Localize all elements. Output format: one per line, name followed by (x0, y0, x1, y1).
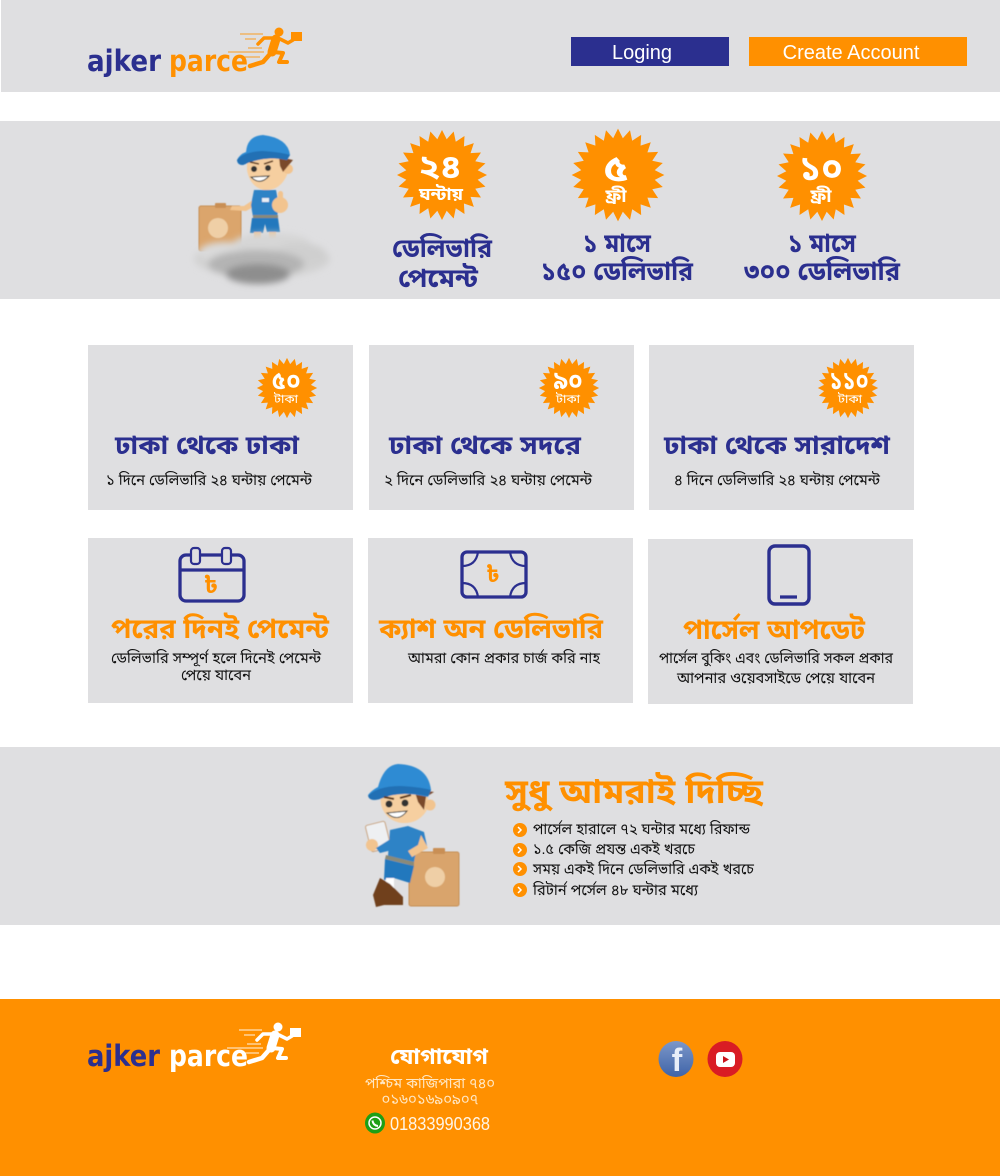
badge: 10 free (777, 131, 867, 221)
pricing card: Dhaka to district (369, 345, 634, 510)
face (386, 800, 392, 808)
heading: সুধু আমরাই দিচ্ছি (504, 771, 764, 812)
courier on cloud illustration (194, 135, 330, 284)
parcel box (409, 852, 459, 906)
benefits list: পার্সেল হারালে ৭২ ঘন্টার মধ্যে রিফান্ড (533, 820, 751, 838)
shoes (373, 878, 403, 907)
login button: Loging (612, 42, 672, 64)
offer text: 300 deliveries: ১ মাসে (788, 228, 856, 258)
feature card: parcel update: পার্সেল আপডেট (683, 612, 865, 645)
arm to box (230, 200, 255, 211)
offer text: delivery payment: ডেলিভারি (392, 232, 492, 263)
icon: banknote (462, 552, 526, 597)
feature card: next-day payment: পরের দিনই পেমেন্ট (111, 612, 329, 644)
badge: 24 hours (397, 130, 487, 220)
icon: whatsapp (365, 1112, 385, 1134)
icon: smartphone (769, 546, 809, 604)
icon: calendar (180, 548, 244, 601)
badge: 5 free (572, 129, 664, 221)
footer logo: ajker (87, 1039, 161, 1073)
pricing card: Dhaka to nationwide (649, 345, 914, 510)
shirt and shorts (388, 826, 427, 862)
header panel (1, 0, 1000, 92)
pricing card: Dhaka to Dhaka: ৫০ (272, 367, 300, 395)
feature card: cash on delivery (368, 538, 633, 703)
head (247, 155, 287, 190)
offer text: 150 deliveries: ১ মাসে (583, 228, 651, 258)
icon: banknote: ৳ (486, 562, 500, 587)
feature card: cash on delivery: ক্যাশ অন ডেলিভারি (378, 612, 604, 644)
badge: 5 free: ফ্রী (604, 186, 627, 206)
header logo (87, 28, 302, 78)
pricing card: Dhaka to district: ৯০ (554, 367, 582, 395)
feature card: parcel update: আপনার ওয়েবসাইডে পেয়ে যাবেন (676, 670, 876, 687)
pricing card: Dhaka to Dhaka: ১ দিনে ডেলিভারি ২৪ ঘন্টায় পেমেন্ট (106, 472, 313, 489)
offer text: delivery payment (392, 232, 492, 293)
offer text: 300 deliveries: ৩০০ ডেলিভারি (744, 255, 900, 286)
pricing card: Dhaka to Dhaka: ঢাকা থেকে ঢাকা (114, 430, 300, 460)
feature card: next-day payment: পেয়ে যাবেন (181, 667, 252, 684)
badge: 24 hours: ঘন্টায় (418, 184, 464, 204)
benefits list: রিটার্ন পর্সেল ৪৮ ঘন্টার মধ্যে (532, 881, 699, 899)
hero band (0, 121, 1000, 299)
offer text: 300 deliveries (744, 228, 900, 286)
feature card: cash on delivery: আমরা কোন প্রকার চার্জ করি নাহ (407, 649, 601, 667)
contact info: 01833990368 (390, 1114, 490, 1134)
contact info (365, 1044, 495, 1134)
header logo: parce (169, 44, 248, 78)
feature card: next-day payment (88, 538, 353, 703)
benefits list: ১.৫ কেজি প্রযন্ত একই খরচে (533, 841, 696, 858)
offer text: 150 deliveries (541, 228, 693, 286)
contact info: পশ্চিম কাজিপারা ৭৪০ (365, 1075, 495, 1091)
footer logo (87, 1022, 301, 1073)
thumbs-up hand (272, 197, 288, 213)
badge: 10 free: ফ্রী (809, 186, 832, 206)
contact info: ০১৬০১৬৯০৯০৭ (382, 1091, 478, 1107)
offer text: 150 deliveries: ১৫০ ডেলিভারি (541, 255, 693, 286)
cap (237, 135, 290, 165)
footer logo: parce (169, 1039, 248, 1073)
contact info: যোগাযোগ (390, 1044, 489, 1069)
feature card: parcel update (648, 539, 913, 704)
pricing card: Dhaka to Dhaka: টাকা (273, 391, 299, 406)
head (380, 792, 428, 823)
benefits list: সময় একই দিনে ডেলিভারি একই খরচে (532, 861, 755, 878)
cap (368, 764, 431, 800)
pricing card: Dhaka to nationwide: ১১০ (830, 367, 868, 395)
benefits band (0, 747, 1000, 925)
pricing card: Dhaka to district: ২ দিনে ডেলিভারি ২৪ ঘন্টায় পেমেন্ট (384, 472, 593, 489)
feature card: next-day payment: ডেলিভারি সম্পূর্ণ হলে দিনেই পেমেন্ট (111, 649, 322, 667)
header logo: ajker (87, 44, 162, 78)
footer (0, 999, 1000, 1176)
icon: calendar: ৳ (204, 572, 218, 598)
face (251, 166, 257, 172)
offer text: delivery payment: পেমেন্ট (398, 262, 479, 293)
icon: facebook: f (672, 1042, 683, 1078)
pricing card: Dhaka to Dhaka (88, 345, 353, 510)
benefits list (513, 820, 755, 899)
shirt and shorts (251, 190, 279, 217)
parcel box (199, 206, 241, 251)
icon: youtube (708, 1041, 742, 1077)
badge: 10 free: ১০ (800, 149, 842, 188)
feature card: parcel update: পার্সেল বুকিং এবং ডেলিভারি সকল প্রকার (659, 649, 894, 667)
cloud (194, 233, 330, 284)
badge: 24 hours: ২৪ (418, 148, 462, 185)
pricing card: Dhaka to nationwide: ঢাকা থেকে সারাদেশ (663, 430, 891, 460)
login button (571, 37, 729, 66)
icon: facebook (658, 1041, 694, 1078)
badge: 5 free: ৫ (603, 148, 629, 189)
create account button (749, 37, 967, 66)
pricing card: Dhaka to nationwide: ৪ দিনে ডেলিভারি ২৪ ঘন্টায় পেমেন্ট (674, 472, 881, 489)
pricing card: Dhaka to nationwide: টাকা (837, 391, 863, 406)
create account button: Create Account (783, 42, 920, 64)
pricing card: Dhaka to district: ঢাকা থেকে সদরে (388, 430, 581, 460)
paper and hand (365, 821, 391, 852)
courier leaning on box illustration (365, 764, 459, 907)
pricing card: Dhaka to district: টাকা (555, 391, 581, 406)
